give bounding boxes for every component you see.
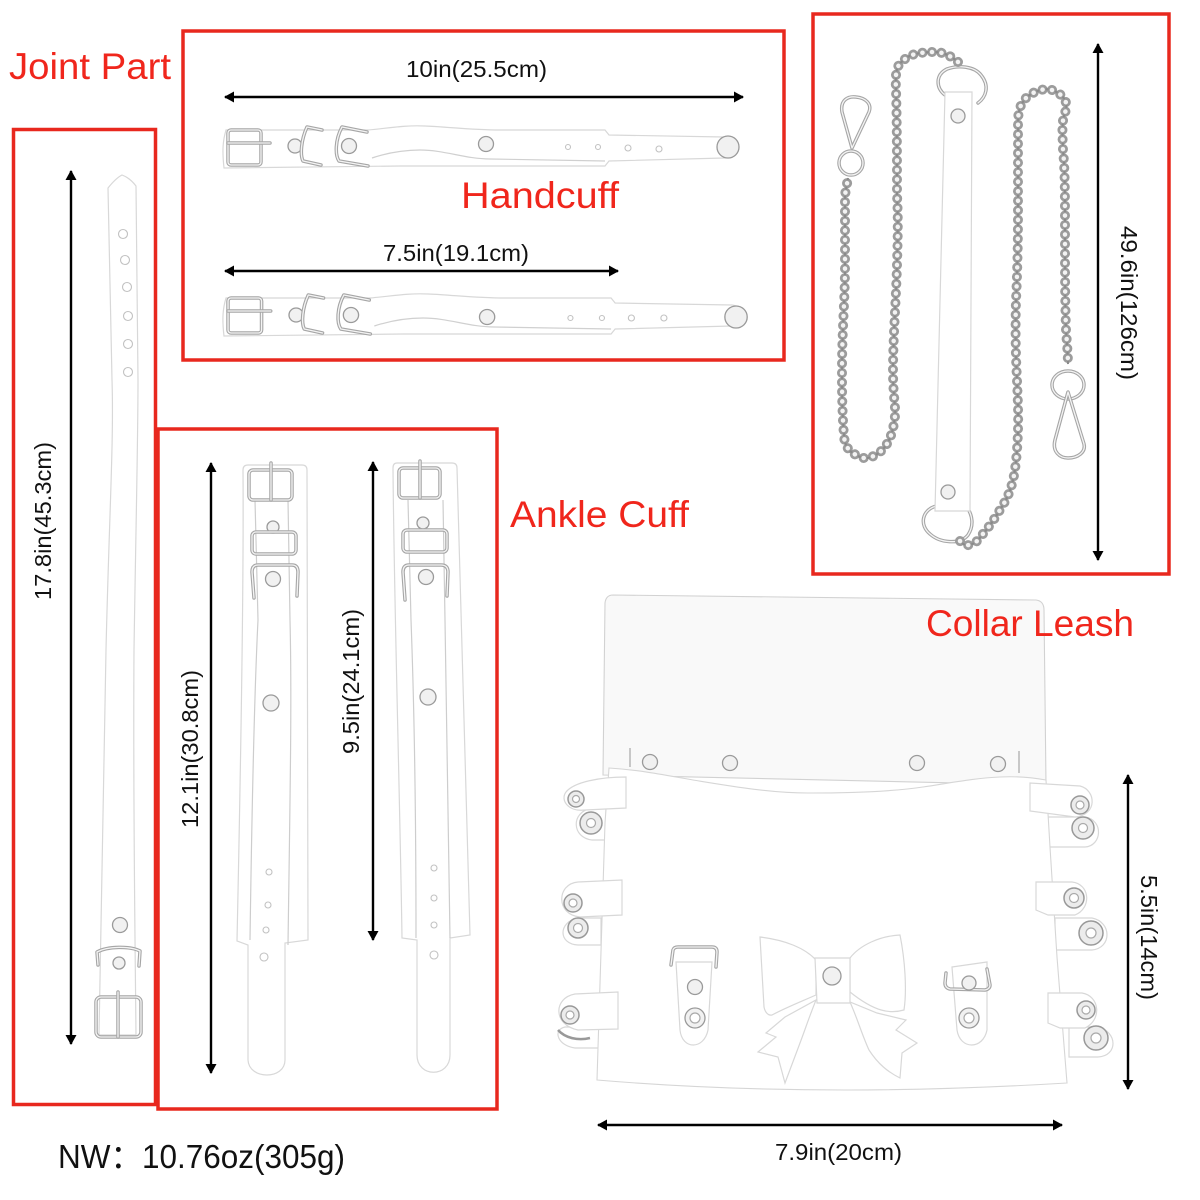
arrow: joint part length	[70, 171, 72, 1044]
arrow: long ankle cuff length	[210, 463, 212, 1073]
dimension: chain: 49.6in(126cm)	[1116, 226, 1142, 380]
illustration: joint part strap	[96, 175, 141, 1037]
left slider	[671, 947, 717, 1045]
chain strap	[935, 92, 972, 511]
underside straps	[558, 808, 1113, 1057]
dimension: joint part: 17.8in(45.3cm)	[30, 442, 56, 600]
illustration: collar	[558, 595, 1113, 1090]
left chain	[842, 52, 958, 458]
panel: handcuff frame	[183, 31, 784, 360]
dimension: collar height: 5.5in(14cm)	[1136, 875, 1162, 1000]
panel: joint part frame	[14, 130, 156, 1104]
back panel rivets	[630, 748, 1019, 773]
dimension: collar width: 7.9in(20cm)	[775, 1139, 902, 1165]
arrow: collar width	[598, 1124, 1062, 1126]
arrow: short ankle cuff length	[372, 462, 374, 940]
illustration: ankle cuff long	[237, 463, 308, 1075]
dimension: long ankle cuff: 12.1in(30.8cm)	[177, 670, 203, 828]
heading: Ankle Cuff: Ankle Cuff	[510, 494, 690, 535]
illustration: collar leash chain	[839, 52, 1084, 545]
illustration: short handcuff	[223, 294, 747, 336]
collar side tabs	[558, 777, 1108, 1050]
panel: ankle cuff frame	[158, 429, 497, 1109]
dimension: long handcuff: 10in(25.5cm)	[406, 56, 547, 82]
collar front panel	[597, 768, 1067, 1090]
dimension: short ankle cuff: 9.5in(24.1cm)	[338, 609, 364, 754]
heading: Handcuff: Handcuff	[461, 175, 620, 216]
right chain	[960, 89, 1068, 545]
heading: Joint Part: Joint Part	[9, 46, 172, 87]
heading: Collar Leash: Collar Leash	[926, 603, 1134, 644]
text: net weight: NW：10.76oz(305g)	[58, 1138, 345, 1175]
arrow: chain length	[1097, 44, 1099, 560]
arrow: short handcuff length	[225, 270, 618, 272]
illustration: long handcuff	[223, 126, 739, 168]
bow	[758, 935, 917, 1083]
metal rings and hooks	[839, 67, 1084, 542]
collar back panel	[603, 595, 1046, 785]
dimension: short handcuff: 7.5in(19.1cm)	[383, 240, 529, 266]
illustration: ankle cuff short	[393, 461, 470, 1072]
arrow: long handcuff length	[225, 96, 743, 98]
right slider	[945, 962, 990, 1045]
arrow: collar height	[1127, 775, 1129, 1089]
panel: collar leash chain frame	[813, 14, 1169, 574]
